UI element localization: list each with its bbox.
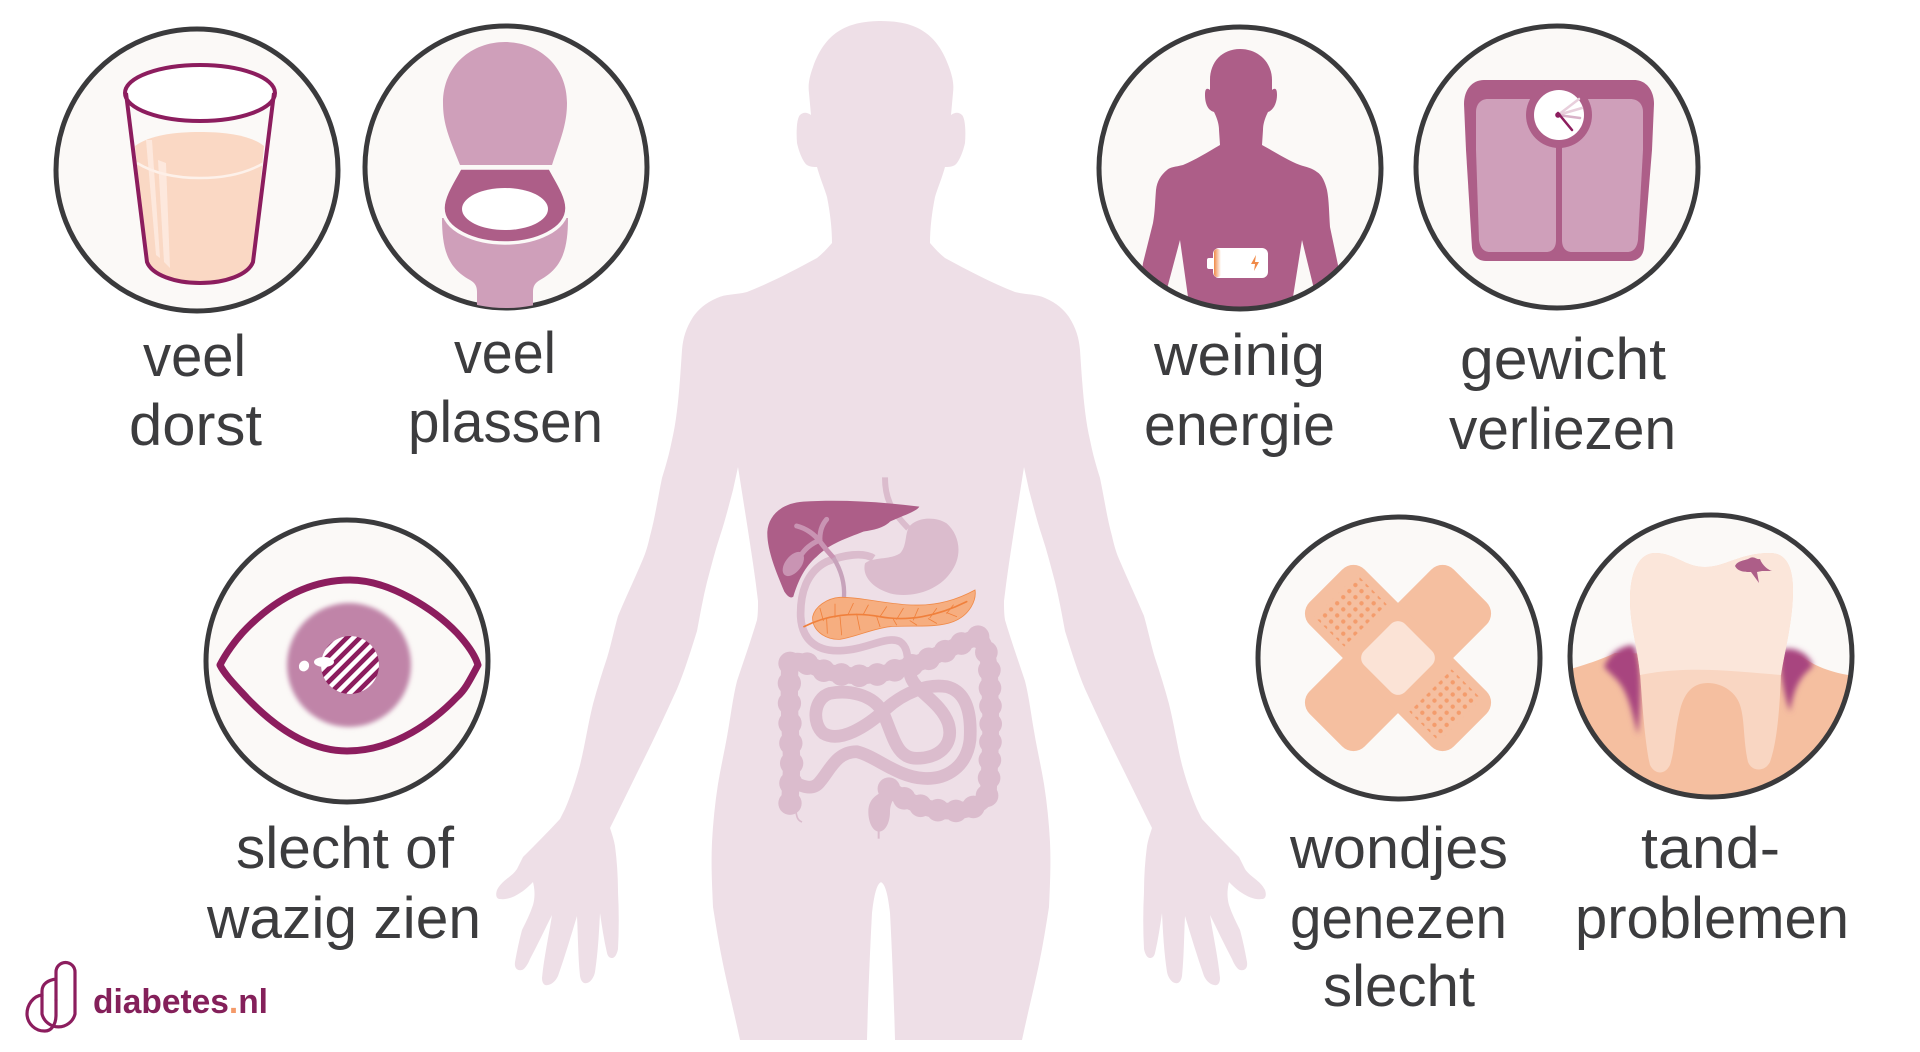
body silhouette [496, 21, 1266, 1040]
large intestine [789, 637, 991, 839]
toilet bowl [442, 218, 568, 312]
pupil [321, 636, 379, 694]
label: slecht of wazig zien: slecht of [236, 816, 455, 881]
label: veel dorst: veel [143, 324, 246, 389]
highlights [297, 657, 334, 673]
label: wondjes genezen slecht [1289, 816, 1508, 1019]
rim [125, 65, 275, 121]
icon: bandage [1258, 517, 1540, 799]
logo: diabetes.nl [27, 962, 268, 1031]
label: tandproblemen [1575, 816, 1849, 951]
label: wondjes genezen slecht: wondjes [1289, 816, 1508, 881]
inflammation [1604, 645, 1640, 735]
logo wordmark: diabetes.nl [93, 983, 268, 1021]
label: veel plassen: plassen [408, 390, 603, 455]
label: weinig energie: weinig [1153, 323, 1325, 388]
cavity [1735, 557, 1772, 583]
label: veel dorst [129, 324, 262, 458]
sigmoid end [868, 788, 897, 832]
person [1142, 49, 1338, 306]
label: weinig energie: energie [1144, 393, 1335, 458]
liquid [135, 132, 264, 283]
pancreas veins [804, 602, 967, 635]
icon: eye [206, 520, 488, 802]
esophagus [885, 477, 908, 528]
label: tandproblemen: tand- [1641, 816, 1780, 881]
digestive organs [767, 477, 991, 839]
small intestine [800, 673, 970, 787]
label: veel plassen [408, 321, 603, 455]
icon: weighing scale [1416, 26, 1698, 308]
dial [1526, 82, 1592, 148]
icon: glass of water [56, 29, 338, 311]
gum [1573, 653, 1848, 794]
liver [767, 501, 919, 597]
toilet lid [443, 42, 567, 165]
label: weinig energie [1144, 323, 1335, 458]
label: slecht of wazig zien: wazig zien [206, 886, 481, 951]
eye outline [220, 580, 478, 751]
glass outline [125, 65, 275, 283]
label: wondjes genezen slecht: genezen [1290, 886, 1507, 951]
scale body [1464, 80, 1654, 261]
centre pad [1357, 617, 1439, 699]
label: veel dorst: dorst [129, 393, 262, 458]
battery [1207, 248, 1268, 278]
tooth crown [1630, 553, 1793, 675]
logo mark [27, 962, 75, 1031]
pancreas [813, 590, 975, 639]
icon: person with low battery [1099, 27, 1381, 320]
label: veel plassen: veel [454, 321, 556, 386]
scale panels [1476, 99, 1556, 252]
icon: toilet [365, 26, 647, 312]
icon: tooth [1560, 515, 1860, 810]
label: wondjes genezen slecht: slecht [1323, 954, 1475, 1019]
duodenum [801, 555, 910, 677]
label: gewicht verliezen: gewicht [1460, 327, 1666, 392]
crossed plasters [1298, 558, 1498, 758]
stomach [864, 519, 958, 595]
label: slecht of wazig zien [206, 816, 481, 951]
label: tandproblemen: problemen [1575, 886, 1849, 951]
label: gewicht verliezen: verliezen [1449, 397, 1676, 462]
bile ducts and gallbladder [778, 519, 844, 597]
label: gewicht verliezen [1449, 327, 1676, 462]
toilet seat [443, 168, 567, 243]
iris [287, 603, 411, 727]
tooth roots [1630, 553, 1793, 772]
reflections [146, 140, 170, 268]
